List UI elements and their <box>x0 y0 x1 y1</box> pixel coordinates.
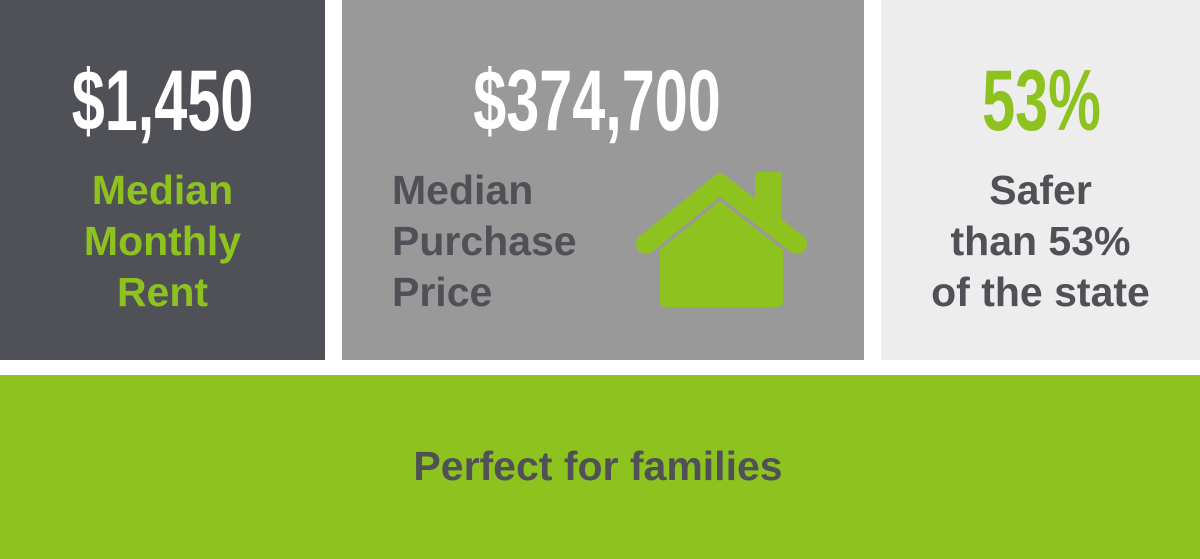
rent label: Median <box>92 167 233 213</box>
panel: median monthly rent <box>0 0 325 360</box>
price label: Purchase <box>392 218 577 264</box>
panel: median purchase price <box>342 0 864 360</box>
safety value: 53% <box>982 53 1101 149</box>
icon: house <box>636 172 807 307</box>
price label <box>392 167 577 315</box>
price label: Median <box>392 167 533 213</box>
banner text: Perfect for families <box>413 443 783 489</box>
safety label: than 53% <box>950 218 1130 264</box>
panel: safety <box>881 0 1200 360</box>
safety label <box>931 167 1150 315</box>
rent label: Rent <box>117 269 208 315</box>
safety label: Safer <box>989 167 1092 213</box>
banner: perfect for families <box>0 375 1200 559</box>
rent label <box>84 167 241 315</box>
price label: Price <box>392 269 492 315</box>
rent value: $1,450 <box>72 53 253 149</box>
price value: $374,700 <box>473 53 721 149</box>
rent label: Monthly <box>84 218 241 264</box>
safety label: of the state <box>931 269 1150 315</box>
